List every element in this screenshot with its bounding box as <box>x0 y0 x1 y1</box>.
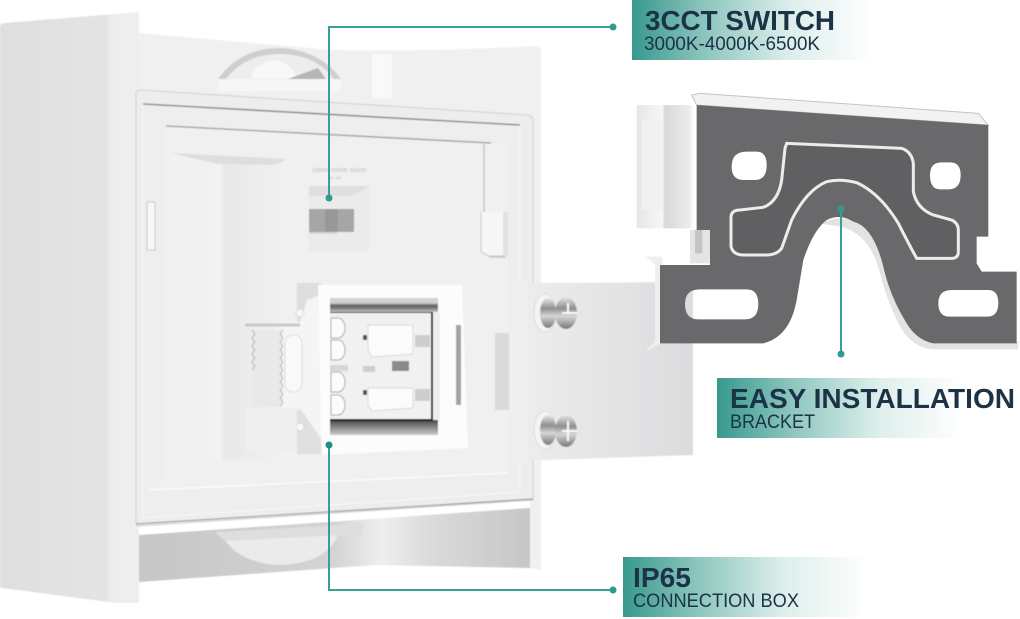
label: IP65: CONNECTION BOX <box>633 591 799 612</box>
bracket foot lip <box>645 257 663 352</box>
IP65 connection box <box>318 285 468 455</box>
3CCT switch slider: 3000K 4000K 6500K <box>312 168 368 174</box>
callout leader: 3CCT switch <box>326 24 616 202</box>
bracket top lip <box>692 93 988 125</box>
label: 3CCT switch: 3CCT SWITCH <box>645 5 835 36</box>
label: easy installation <box>717 378 1015 438</box>
housing outer left wall <box>0 12 139 603</box>
label: IP65: IP65 <box>633 562 691 593</box>
callout leader: bracket <box>838 206 844 358</box>
lower screw <box>534 411 577 449</box>
housing top panel <box>139 33 541 570</box>
label: 3CCT switch <box>632 0 872 60</box>
right serrated strip <box>495 333 509 410</box>
bracket hinge clip <box>637 105 710 263</box>
bracket underside thickness <box>820 218 1018 349</box>
left alcove <box>171 153 297 461</box>
label: IP65 <box>623 557 868 617</box>
terminal levers <box>368 325 413 357</box>
inner compartment <box>148 126 508 490</box>
bracket face <box>660 105 1017 343</box>
product: sensor housing <box>0 12 693 603</box>
mounting plate <box>510 282 693 461</box>
3CCT switch slider <box>309 168 369 251</box>
3CCT switch slider: ⇨ ⇨ <box>328 175 342 182</box>
vertical slit <box>456 325 461 405</box>
label: 3CCT switch: 3000K-4000K-6500K <box>644 34 820 55</box>
label: easy installation: BRACKET <box>730 412 815 433</box>
upper screw <box>534 294 577 332</box>
callout leader: connection box <box>326 442 616 594</box>
top sensor lens <box>218 48 341 91</box>
metal installation bracket <box>637 93 1018 352</box>
side clips <box>147 202 155 250</box>
terminal holes <box>331 318 345 415</box>
label: easy installation: EASY INSTALLATION <box>730 383 1015 414</box>
bracket embossed outline <box>731 143 958 258</box>
left serrated terminal bracket <box>245 283 322 454</box>
bottom sensor lens <box>221 528 340 565</box>
lower opening shadow <box>139 508 530 582</box>
housing front frame <box>136 90 533 526</box>
